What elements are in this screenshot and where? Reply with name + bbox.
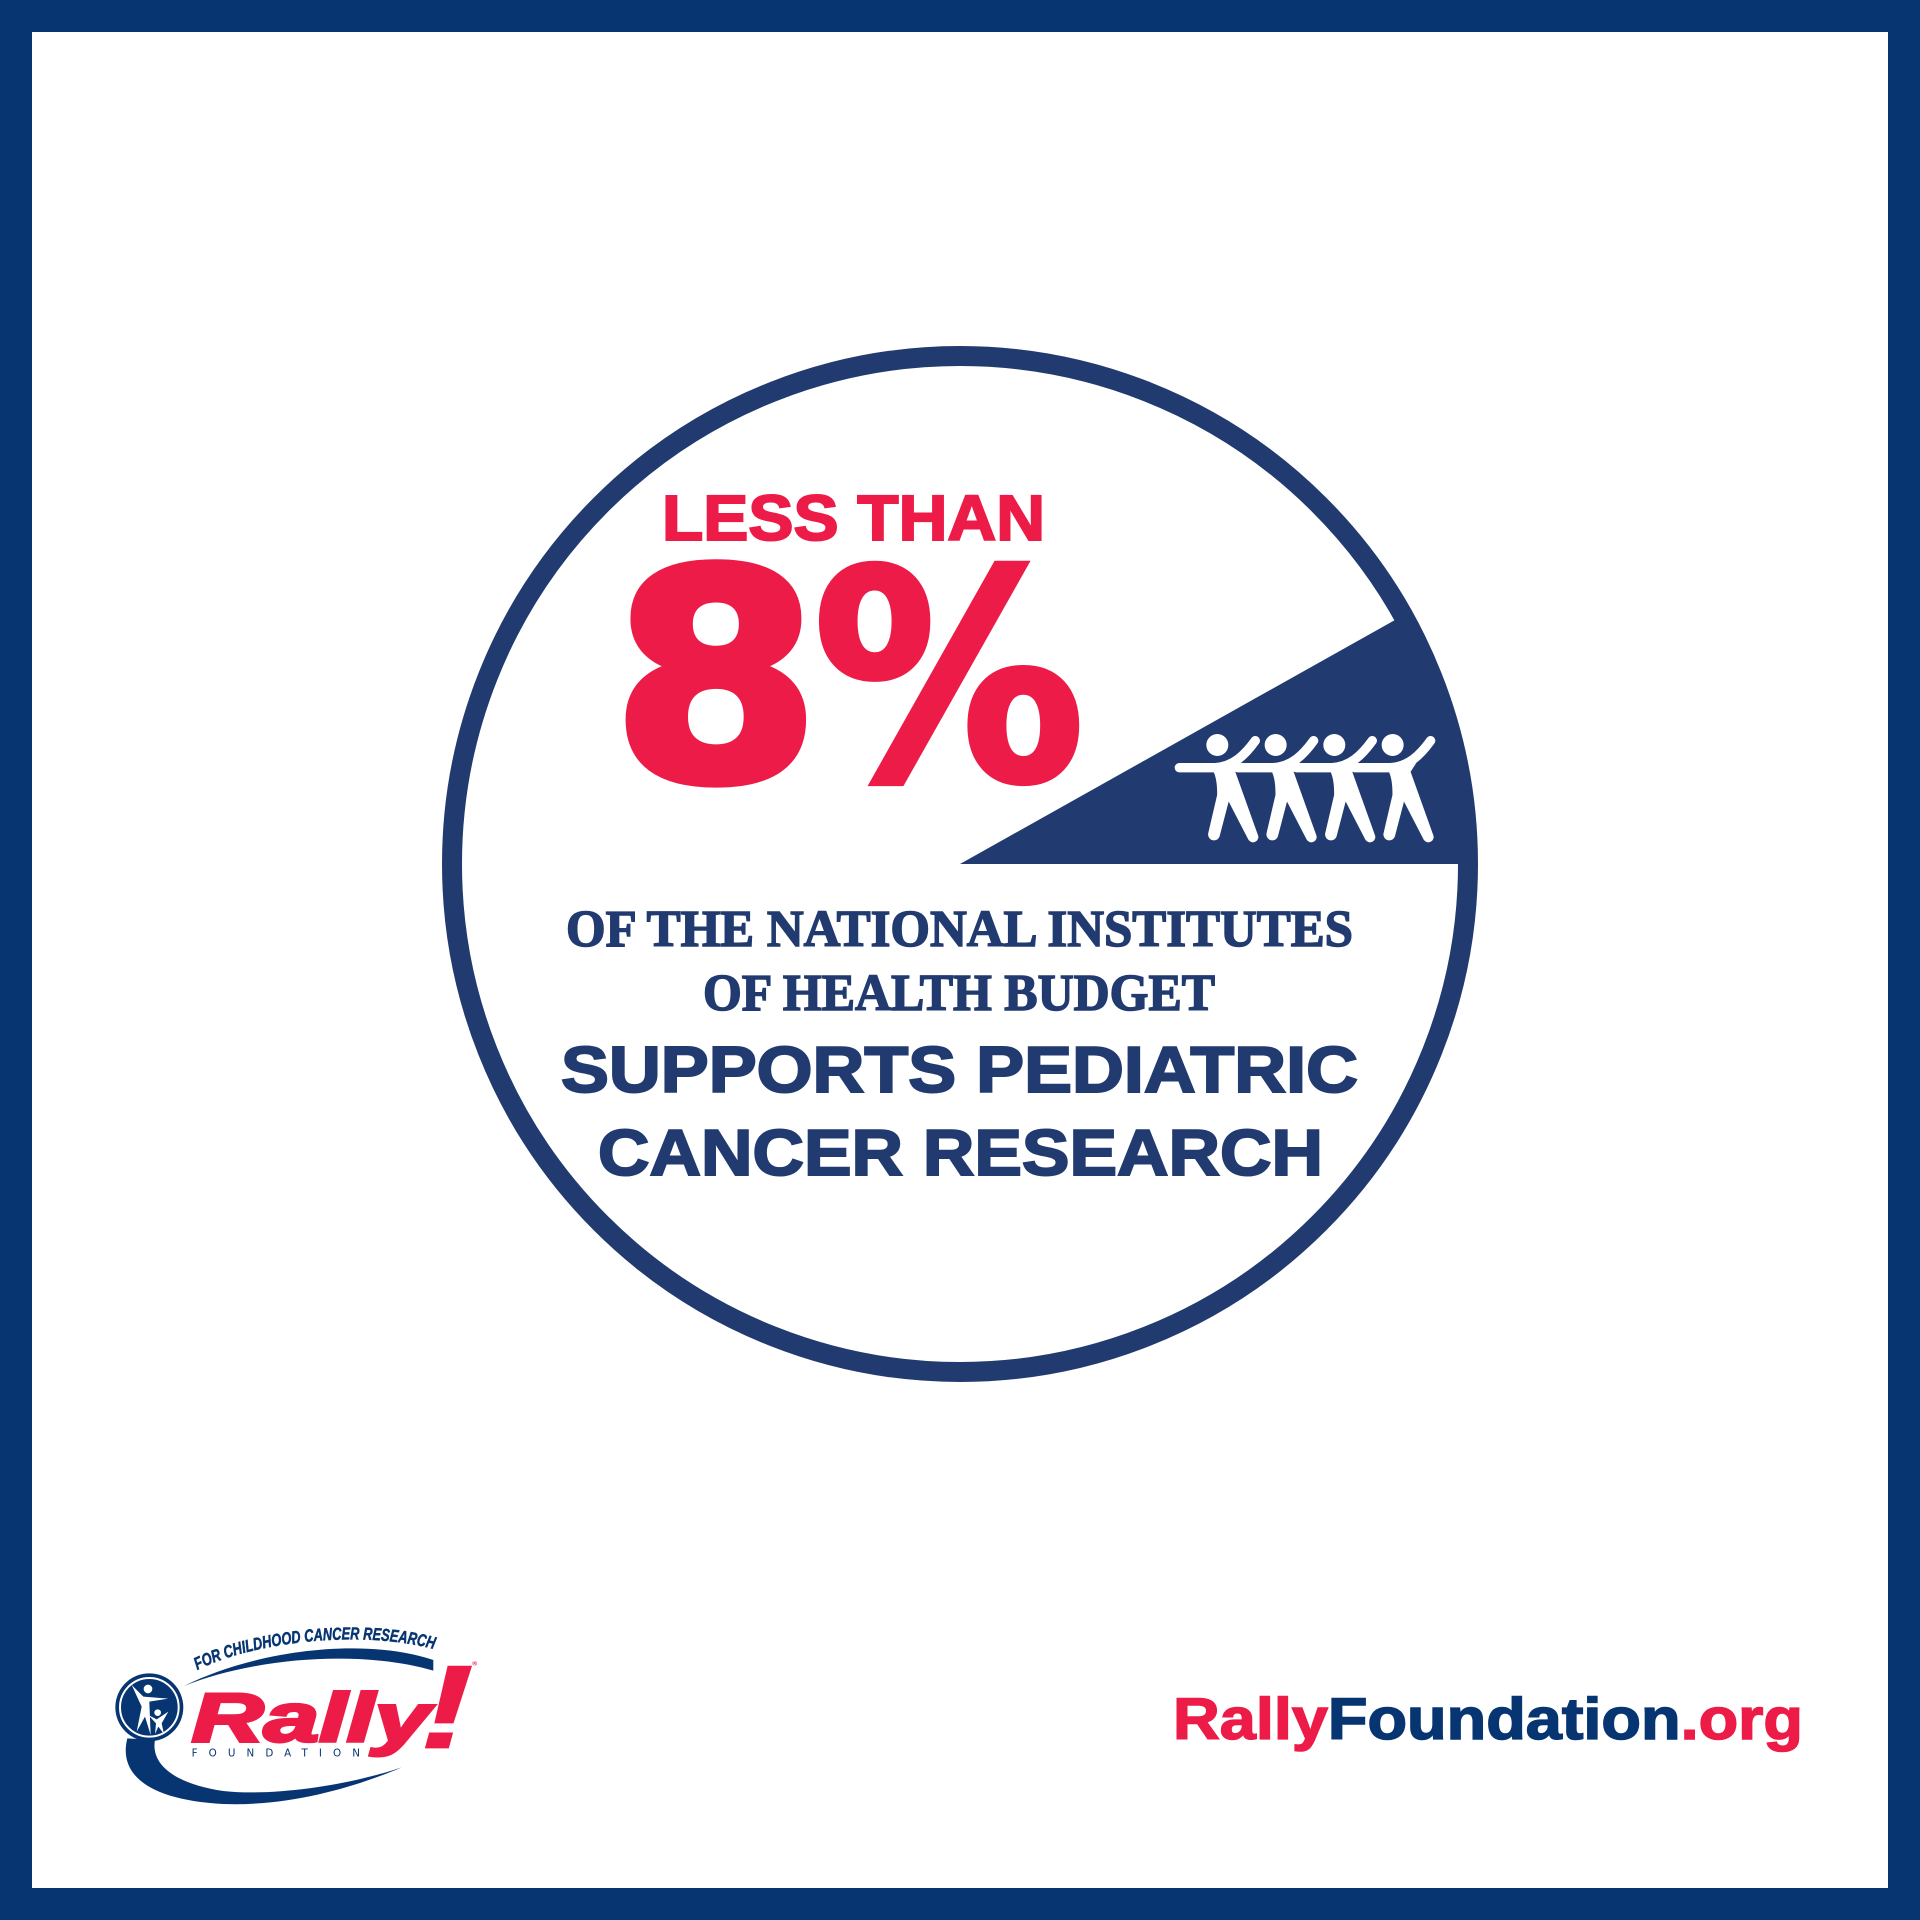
text: supports pediatric cancer research [561,1033,1358,1189]
text: of the national institutes of health budget [566,901,1353,1022]
line 2: OF HEALTH BUDGET [703,965,1215,1022]
big number: 8 percent [612,511,1085,848]
logo foundation: FOUNDATION [192,1748,360,1760]
logo tagline: FOR CHILDHOOD CANCER RESEARCH [194,1627,438,1670]
icon: person 3 [1296,734,1374,841]
percent sign: % [813,511,1085,848]
icon: person 4 [1355,734,1432,841]
line 3: SUPPORTS PEDIATRIC [561,1033,1358,1106]
website url: Rally Foundation .org [1173,1687,1803,1752]
line 4: CANCER RESEARCH [598,1116,1323,1189]
logo exclamation mark: ! [418,1640,475,1774]
heading: less than: LESS THAN [662,482,1045,554]
icon: row of four people [1179,734,1432,841]
digit 8: 8 [612,511,820,848]
icon: person 1 [1179,734,1257,841]
line 1: OF THE NATIONAL INSTITUTES [566,901,1353,958]
logo upper swoosh [184,1648,433,1686]
logo emblem [115,1673,183,1741]
logo lower swoosh [126,1738,402,1804]
logo registered mark: ® [472,1660,477,1668]
pie chart [452,356,1468,1372]
pie slice: 8 percent [960,620,1460,864]
icon: person 2 [1238,734,1315,841]
logo wordmark Rally: Rally [192,1681,434,1757]
pie chart outline [452,356,1468,1372]
logo: Rally Foundation [115,1627,478,1804]
